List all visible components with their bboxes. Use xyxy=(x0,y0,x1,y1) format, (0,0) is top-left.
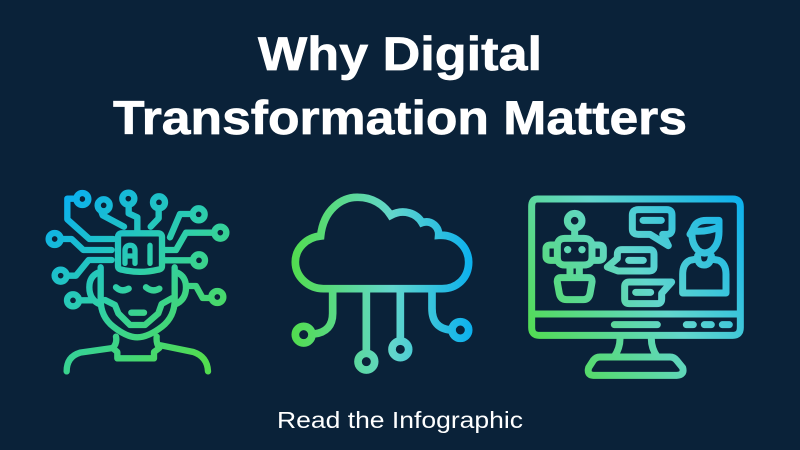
icon: cloud with connected nodes xyxy=(295,197,469,370)
robot eye left xyxy=(564,246,571,253)
screen bars xyxy=(614,314,729,335)
footer text: Read the Infographic xyxy=(277,407,523,433)
chat bubbles xyxy=(632,210,672,246)
robot xyxy=(546,228,603,300)
monitor frame xyxy=(532,199,740,335)
title xyxy=(113,27,687,144)
robot eye right xyxy=(578,246,586,253)
title: Transformation Matters xyxy=(113,91,687,144)
title: Why Digital xyxy=(258,27,542,80)
monitor stand xyxy=(588,339,683,375)
person xyxy=(690,220,719,253)
icon: AI head with circuit nodes xyxy=(49,193,226,371)
icon: monitor with robot, chat bubbles and person xyxy=(532,199,740,375)
